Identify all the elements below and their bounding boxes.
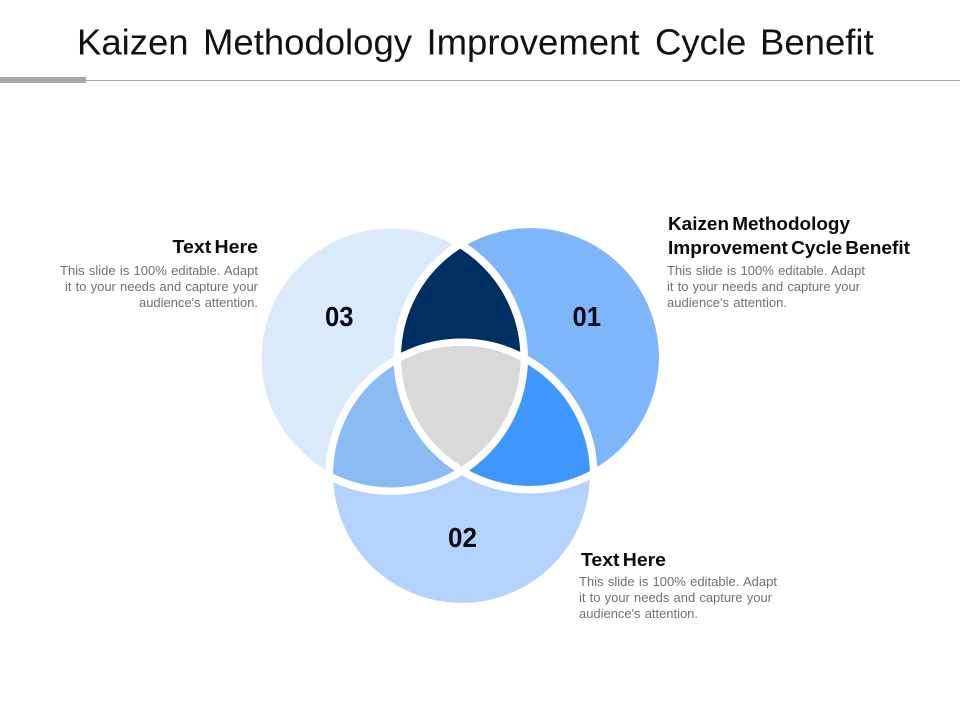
title: Cycle xyxy=(655,22,746,62)
header rule xyxy=(0,77,960,83)
text block: 02 xyxy=(579,549,777,621)
text block: 03: Text Here xyxy=(172,236,258,257)
text block: 02: Text Here xyxy=(581,549,666,570)
circle 01 xyxy=(401,228,659,486)
overlap 01 and 02 xyxy=(401,346,590,486)
text block: 01: Kaizen Methodology xyxy=(668,213,851,234)
title: Methodology xyxy=(203,22,413,62)
venn diagram xyxy=(258,224,663,607)
text block: 01: it to your needs and capture your xyxy=(667,279,861,294)
text block: 01: audience's attention. xyxy=(667,295,787,310)
text block: 01: Improvement Cycle Benefit xyxy=(668,237,910,258)
text block: 01: This slide is 100% editable. Adapt xyxy=(667,263,865,278)
title: Improvement xyxy=(426,22,640,62)
centre overlap xyxy=(401,346,520,466)
overlap 02 and 03 xyxy=(333,347,506,488)
number 02: 02 xyxy=(448,522,477,553)
overlap 01 and 03 xyxy=(401,248,520,355)
text block: 02: it to your needs and capture your xyxy=(579,590,773,605)
text block: 02: This slide is 100% editable. Adapt xyxy=(579,574,777,589)
text block: 01 xyxy=(667,213,910,310)
number 03: 03 xyxy=(325,301,354,332)
text block: 03: audience's attention. xyxy=(139,295,258,310)
title: Kaizen xyxy=(77,22,189,62)
text block: 03 xyxy=(60,236,259,310)
text block: 03: This slide is 100% editable. Adapt xyxy=(60,263,258,278)
number 01: 01 xyxy=(572,301,601,332)
circle 03 xyxy=(262,228,520,488)
text block: 02: audience's attention. xyxy=(579,606,698,621)
text block: 03: it to your needs and capture your xyxy=(65,279,259,294)
title: Benefit xyxy=(760,22,874,62)
circle 02 xyxy=(333,346,590,603)
white rings xyxy=(258,224,663,607)
